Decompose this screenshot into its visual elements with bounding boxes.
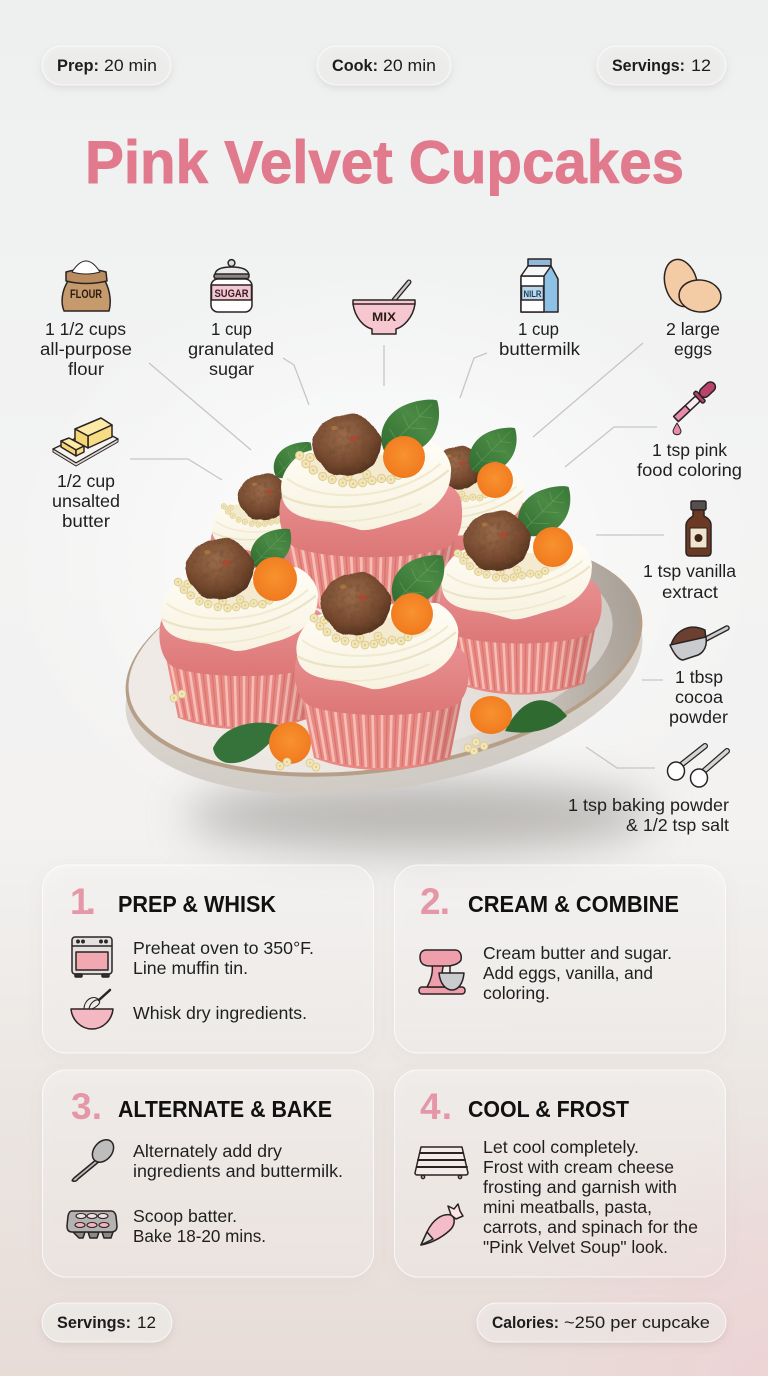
info pill: cook time: Cook: [332,56,378,75]
step heading: ALTERNATE & BAKE [118,1096,332,1122]
ingredient: baking powder and salt [568,746,729,835]
step text: whisk: Whisk dry ingredients. [133,1003,307,1023]
panel: step 4 cool and frost [394,1070,726,1277]
info pill: servings [597,46,726,85]
step number: 1. [70,881,96,922]
card background [394,865,726,1053]
step text: cool and frost: carrots, and spinach for the [483,1217,698,1237]
connector lines [130,343,664,768]
step text: cream: Add eggs, vanilla, and [483,963,653,983]
icon: piping bag [421,1204,463,1245]
cupcake: back right [397,428,533,599]
icon: spoon [72,1136,118,1181]
step text: alternate: Alternately add dry [133,1141,282,1161]
ingredient: buttermilk [499,259,580,359]
step text: cool and frost: frosting and garnish with [483,1177,677,1197]
label: flour: flour [68,359,104,379]
icon: measuring spoons [668,746,727,787]
panel: step 3 alternate and bake [42,1070,374,1277]
label: eggs: eggs [674,339,712,359]
info pill: servings: Servings: [612,56,685,75]
info pill: calories [477,1303,726,1342]
cupcake: top center [279,400,462,615]
label: buttermilk: buttermilk [499,339,580,359]
label: butter [52,471,120,531]
ingredient: sugar [188,260,274,379]
step heading: COOL & FROST [468,1096,630,1122]
title: Pink Velvet Cupcakes [85,129,684,196]
info pill: prep time: Prep: [57,56,99,75]
info pill: servings footer [42,1303,172,1342]
label: butter: unsalted [52,491,120,511]
icon: cocoa scoop [670,627,727,660]
cupcake plate illustration [108,400,660,828]
panel: step 2 cream and combine [394,865,726,1053]
step text: scoop and bake: Scoop batter. [133,1206,237,1226]
icon: mixing bowl [353,282,415,334]
label: sugar: sugar [209,359,254,379]
label: sugar: 1 cup [211,319,252,339]
cupcake: back left [211,442,329,610]
step number: 3. [71,1086,102,1127]
icon: flour sack: FLOUR [70,289,103,301]
step text: cool and frost: "Pink Velvet Soup" look. [483,1237,668,1257]
step text: cool and frost: Let cool completely. [483,1137,639,1157]
ingredient: flour [40,261,132,379]
icon: whisk and bowl [71,990,113,1029]
cupcake: right [440,486,602,695]
card background [394,1070,726,1277]
ingredient: food coloring [637,378,742,480]
label: sugar: granulated [188,339,274,359]
label: vanilla: 1 tsp vanilla [643,561,736,581]
card background [42,1070,374,1277]
step text: cream: Cream butter and sugar. [483,943,672,963]
step text: cool and frost: mini meatballs, pasta, [483,1197,652,1217]
ingredient: butter [52,418,120,531]
info pill: calories: ~250 per cupcake [564,1313,710,1332]
step text: cool and frost: Frost with cream cheese [483,1157,674,1177]
cupcake: front [295,555,469,770]
label: vanilla [643,561,736,602]
step text: cream [483,943,672,1003]
info pill: prep time: 20 min [104,56,157,75]
step text: preheat [133,938,314,978]
info pill: calories: Calories: [492,1313,559,1332]
loose garnish [170,690,567,771]
icon: muffin tin [67,1211,117,1238]
label: flour: all-purpose [40,339,132,359]
label: cocoa: cocoa [675,687,723,707]
card background [42,865,374,1053]
icon: dropper [671,378,719,435]
label: butter: 1/2 cup [57,471,115,491]
ingredient: eggs [659,256,722,359]
info pill: servings footer: 12 [137,1313,156,1332]
label: flour: 1 1/2 cups [45,319,126,339]
icon: butter on a tray [53,418,118,466]
info pill: cook time: 20 min [383,56,436,75]
step text: preheat: Line muffin tin. [133,958,248,978]
step text: alternate: ingredients and buttermilk. [133,1161,343,1181]
icon: mixing bowl: MIX [372,310,396,324]
icon: eggs [659,256,722,314]
step text: cool and frost [483,1137,698,1257]
label: vanilla: extract [662,582,718,602]
cupcake: left [159,529,328,729]
label: butter: butter [62,511,110,531]
step text: alternate [133,1141,343,1181]
step text: scoop and bake: Bake 18-20 mins. [133,1226,266,1246]
label: cocoa: 1 tbsp [675,667,723,687]
icon: stand mixer [419,950,465,994]
info pill: prep time [42,46,171,85]
step number: 4. [420,1086,452,1127]
icon: milk carton: NILR [524,289,542,299]
icon: cooling rack [415,1147,468,1179]
step text: preheat: Preheat oven to 350°F. [133,938,314,958]
label: baking powder and salt: 1 tsp baking powder [568,795,729,815]
ingredient: cocoa [669,627,728,727]
ingredient: vanilla [643,501,736,602]
label: cocoa [669,667,728,727]
info pill: cook time [317,46,451,85]
step text: cream: coloring. [483,983,550,1003]
label: food coloring: food coloring [637,460,742,480]
step text: scoop and bake [133,1206,266,1246]
label: baking powder and salt [568,795,729,835]
icon: oven [72,937,112,977]
label: sugar [188,319,274,379]
label: eggs: 2 large [666,319,720,339]
step heading: CREAM & COMBINE [468,891,679,917]
plate shadow [185,779,655,851]
plate [108,502,660,828]
icon: sugar jar: SUGAR [214,288,249,300]
label: buttermilk: 1 cup [518,319,559,339]
info pill: servings footer: Servings: [57,1313,131,1332]
step heading: PREP & WHISK [118,891,276,917]
icon: vanilla bottle [686,501,711,556]
label: baking powder and salt: & 1/2 tsp salt [626,815,729,835]
label: eggs [666,319,720,359]
panel: step 1 prep and whisk [42,865,374,1053]
label: food coloring: 1 tsp pink [652,440,727,460]
label: food coloring [637,440,742,480]
label: flour [40,319,132,379]
label: buttermilk [499,319,580,359]
info pill: servings: 12 [691,56,711,75]
label: cocoa: powder [669,707,728,727]
step number: 2. [420,881,450,922]
